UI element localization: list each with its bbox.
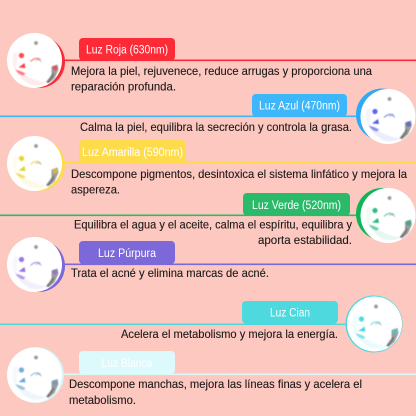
panel: luz amarilla — [7, 136, 416, 196]
text: red description — [71, 64, 372, 94]
text: green description: aporta estabilidad. — [258, 233, 352, 247]
text: white description — [69, 377, 362, 407]
text: blue description: Calma la piel, equilibra la secreción y controla la grasa. — [80, 120, 352, 134]
icon: red light mask — [7, 33, 65, 88]
text: red description: Mejora la piel, rejuvenece, reduce arrugas y proporciona una — [71, 64, 372, 78]
text: cyan description: Acelera el metabolismo y mejora la energía. — [121, 327, 338, 341]
text: green description — [74, 218, 352, 247]
text: yellow description: aspereza. — [71, 182, 120, 196]
panel: luz cian — [0, 296, 402, 352]
icon: yellow light mask — [7, 136, 65, 191]
panel: luz roja — [7, 33, 416, 94]
panel: luz verde — [0, 188, 416, 247]
icon: white light mask — [7, 347, 64, 403]
icon: purple light mask — [7, 237, 65, 292]
badge: Luz Azul — [252, 94, 347, 116]
line: blue — [0, 116, 358, 117]
badge: Luz Amarilla: Luz Amarilla (590nm) — [82, 147, 183, 159]
badge: Luz Blanca: Luz Blanca — [102, 358, 153, 370]
badge: Luz Roja: Luz Roja (630nm) — [86, 44, 168, 56]
badge: Luz Purpura — [79, 241, 175, 264]
badge: Luz Cian: Luz Cian — [270, 308, 310, 320]
line: white — [60, 374, 416, 375]
text: white description: Descompone manchas, mejora las líneas finas y acelera el — [69, 377, 362, 391]
badge: Luz Verde — [243, 193, 350, 216]
text: red description: reparación profunda. — [71, 80, 176, 94]
line: cyan — [0, 324, 348, 325]
badge: Luz Amarilla — [79, 140, 186, 163]
line: green — [0, 214, 358, 216]
text: green description: Equilibra el agua y el aceite, calma el espíritu, equilibra y — [74, 218, 352, 232]
icon: cyan light mask — [346, 296, 402, 352]
badge: Luz Cian — [242, 301, 338, 324]
badge: Luz Roja — [79, 38, 175, 60]
icon: blue light mask — [356, 88, 416, 144]
panel: luz azul — [0, 88, 416, 144]
text: purple description: Trata el acné y elimina marcas de acné. — [71, 266, 269, 280]
text: yellow description — [71, 167, 407, 196]
panel: luz purpura — [7, 237, 416, 292]
badge: Luz Azul: Luz Azul (470nm) — [259, 100, 340, 112]
panel: luz blanca — [7, 347, 416, 407]
badge: Luz Purpura: Luz Púrpura — [98, 248, 157, 260]
line: yellow — [60, 162, 416, 163]
line: purple — [60, 264, 416, 265]
line: red — [60, 60, 416, 61]
badge: Luz Blanca — [79, 351, 175, 374]
badge: Luz Verde: Luz Verde (520nm) — [252, 200, 341, 212]
text: white description: metabolismo. — [69, 393, 136, 407]
icon: green light mask — [356, 188, 416, 243]
